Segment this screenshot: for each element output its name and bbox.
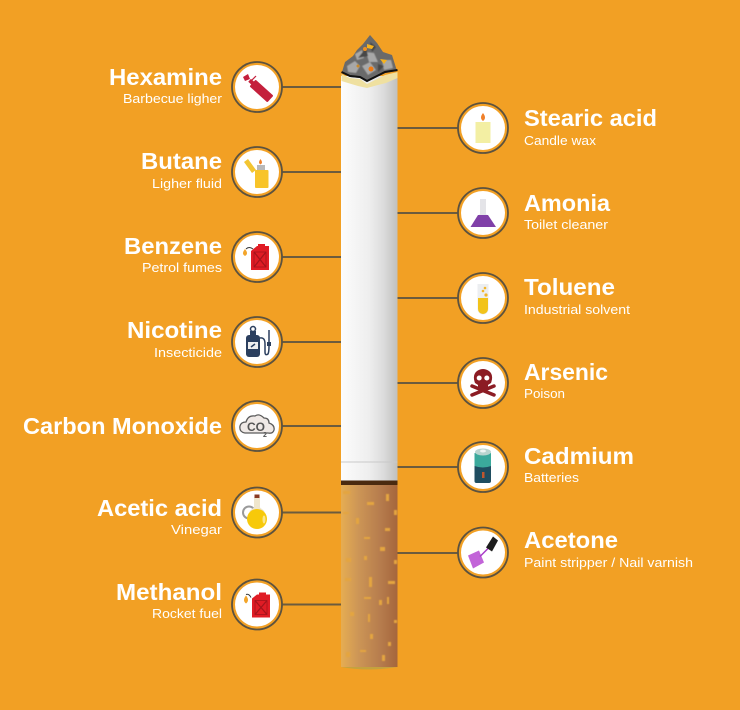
label: Toluene: Industrial solvent (524, 302, 630, 317)
icon: flask (458, 188, 508, 238)
label: Methanol: Methanol (116, 579, 222, 605)
label: Cadmium: Cadmium (524, 443, 634, 469)
label: Acetic acid: Acetic acid (97, 495, 222, 521)
label: Nicotine: Insecticide (154, 345, 222, 360)
item: Methanol (116, 579, 282, 630)
item: Amonia (458, 188, 610, 238)
item: Butane (141, 147, 282, 197)
label: Arsenic: Arsenic (524, 359, 608, 385)
item: Hexamine (109, 62, 282, 112)
label: Butane (141, 148, 222, 191)
label: Toluene: Toluene (524, 274, 615, 300)
icon: CO2 cloud: 2 (263, 432, 267, 439)
label: Acetic acid (97, 495, 223, 537)
label: Amonia: Toilet cleaner (524, 217, 609, 232)
item: Stearic acid (458, 103, 657, 153)
label: Acetone (524, 527, 693, 570)
icon: insecticide sprayer (232, 317, 282, 367)
item: Acetone (458, 527, 693, 578)
label: Arsenic: Poison (524, 386, 565, 401)
label: Acetic acid: Vinegar (171, 522, 223, 537)
label: Amonia (524, 190, 610, 232)
item: Acetic acid (97, 488, 282, 538)
item: Benzene (124, 232, 282, 282)
icon: vinegar bottle (232, 488, 282, 538)
icon: fuel can (232, 580, 282, 630)
label: Benzene: Petrol fumes (142, 260, 223, 275)
cigarette paper (341, 76, 398, 485)
icon: CO2 cloud: CO (247, 420, 265, 434)
label: Butane: Butane (141, 148, 222, 174)
label: Nicotine (127, 317, 222, 360)
icon: test tube (458, 273, 508, 323)
icon: petrol can (232, 232, 282, 282)
icon: barbecue lighter (232, 62, 282, 112)
label: Methanol: Rocket fuel (152, 606, 222, 621)
icon: lighter (232, 147, 282, 197)
icon: CO2 cloud (232, 401, 282, 451)
label: Toluene (524, 274, 630, 317)
label: Benzene (124, 233, 223, 275)
label: Methanol (116, 579, 222, 621)
label: Benzene: Benzene (124, 233, 222, 259)
burning tip (342, 35, 398, 88)
connector lines (282, 87, 458, 604)
label: Hexamine: Hexamine (109, 64, 222, 90)
label: Arsenic (524, 359, 608, 401)
label: Hexamine: Barbecue ligher (123, 91, 223, 106)
icon: candle (458, 103, 508, 153)
item: Arsenic (458, 358, 608, 408)
item: Carbon Monoxide (23, 401, 282, 451)
label: Stearic acid: Candle wax (524, 133, 597, 148)
icon: battery (458, 442, 508, 492)
item: Toluene (458, 273, 630, 323)
label: Stearic acid: Stearic acid (524, 105, 657, 131)
label: Butane: Ligher fluid (152, 176, 222, 191)
label: Acetone: Acetone (524, 527, 618, 553)
item: Cadmium (458, 442, 634, 492)
label: Cadmium: Batteries (524, 470, 580, 485)
item: Nicotine (127, 317, 282, 367)
cigarette filter (341, 484, 398, 670)
label: Hexamine (109, 64, 223, 106)
icon: nail varnish (458, 528, 508, 578)
label: Cadmium (524, 443, 634, 485)
label: Stearic acid (524, 105, 657, 148)
label: Acetone: Paint stripper / Nail varnish (524, 555, 693, 570)
icon: skull and crossbones (458, 358, 508, 408)
cigarette (341, 35, 398, 670)
label: Carbon Monoxide: Carbon Monoxide (23, 413, 222, 439)
label: Nicotine: Nicotine (127, 317, 222, 343)
label: Amonia: Amonia (524, 190, 610, 216)
